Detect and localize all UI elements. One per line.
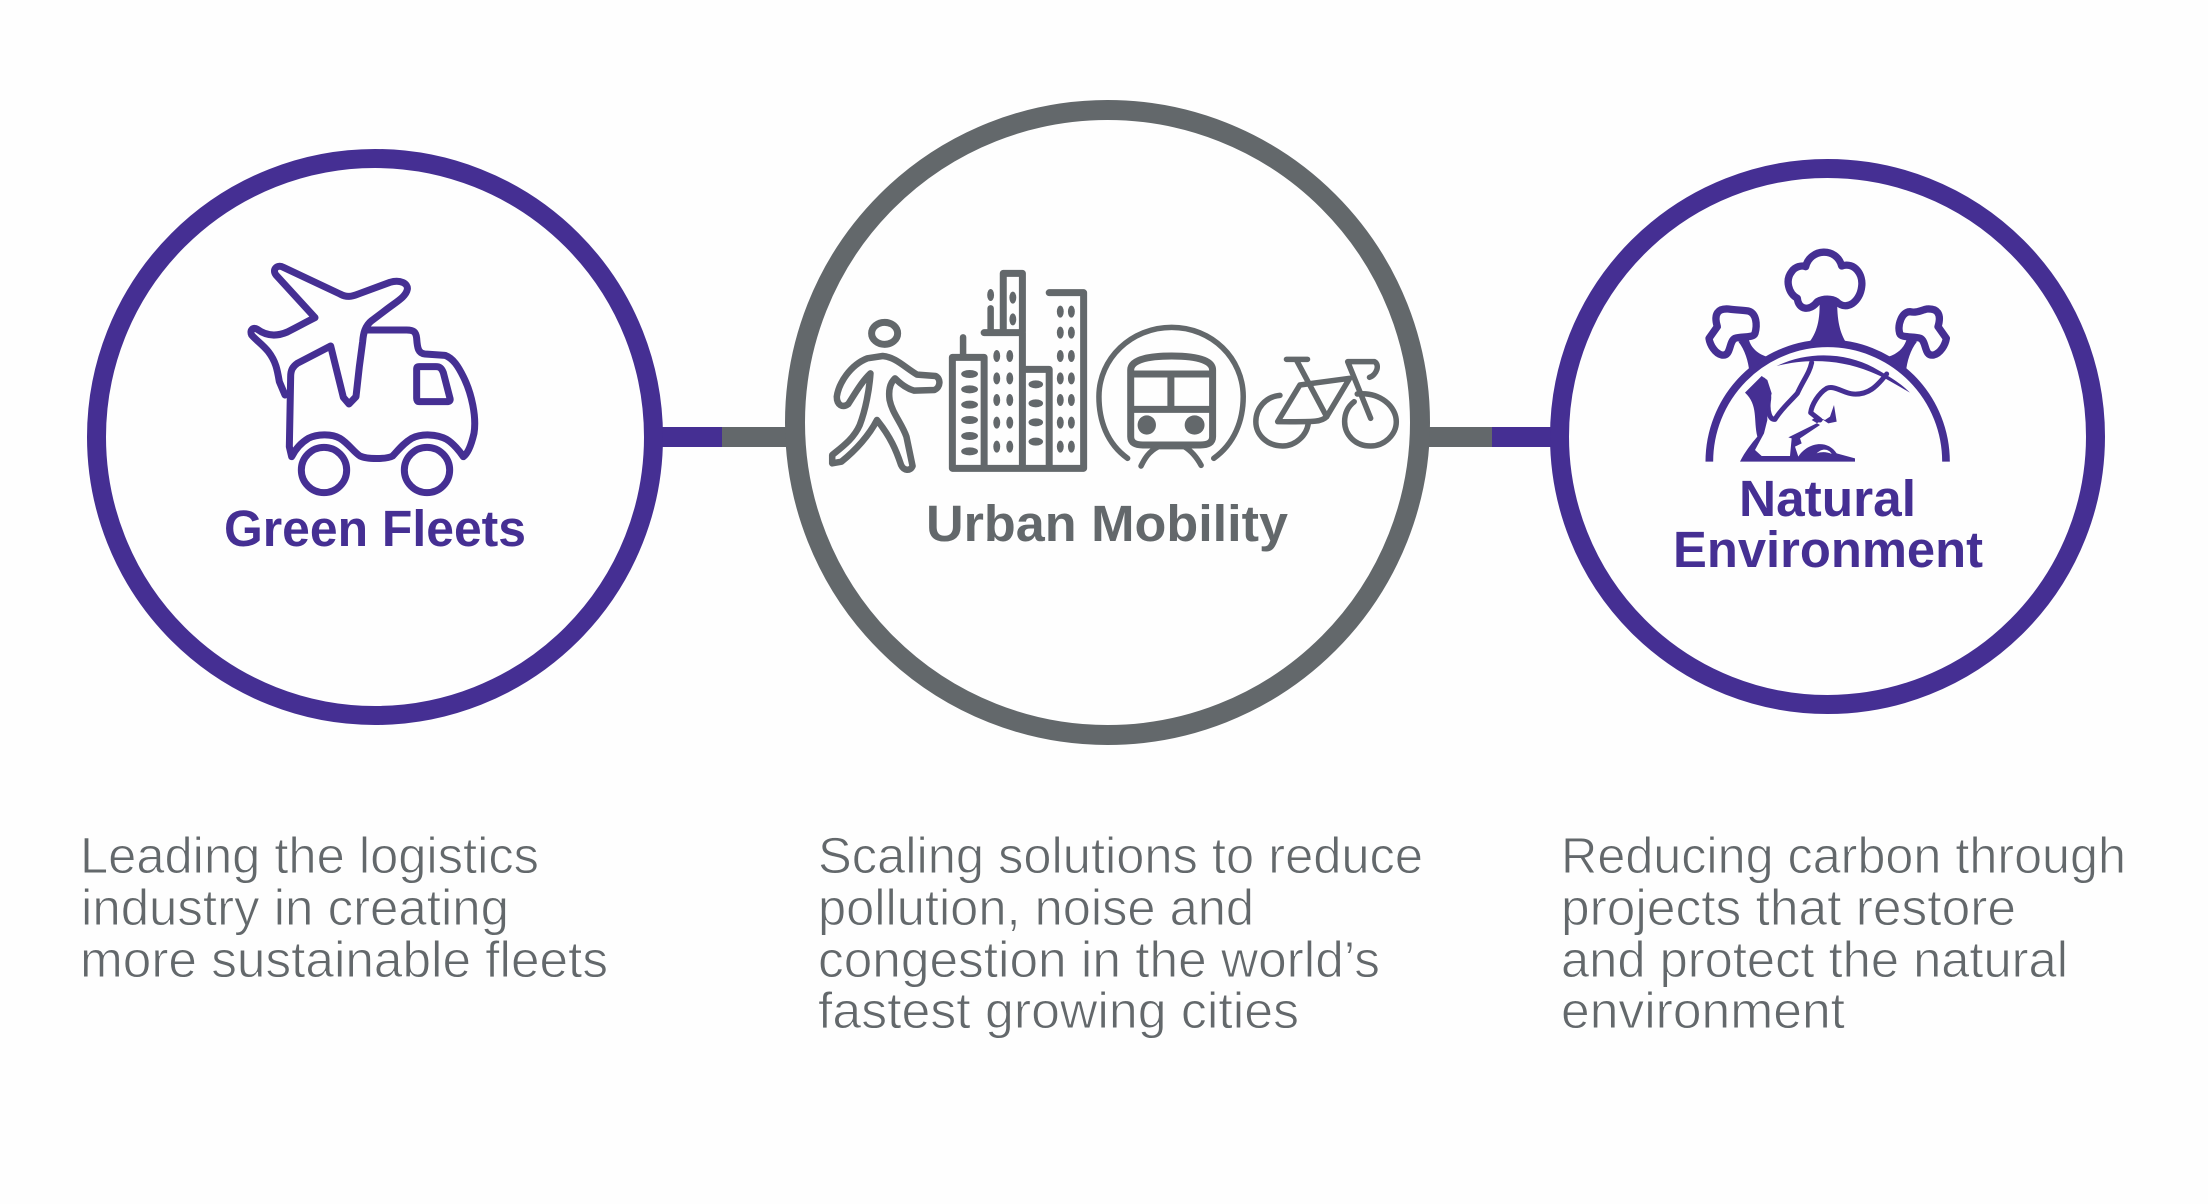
- text block: natural environment description: projects that restore: [1561, 879, 2016, 936]
- text block: urban mobility description: fastest growing cities: [818, 982, 1299, 1039]
- icon: plane and truck: [251, 266, 475, 493]
- text block: natural environment description: environment: [1561, 982, 1845, 1039]
- circle ring: natural environment: [1560, 168, 2096, 704]
- text block: green fleets description: more sustainable fleets: [80, 931, 608, 988]
- text block: green fleets description: Leading the logistics: [80, 827, 539, 884]
- panel: natural environment: [1560, 168, 2096, 704]
- text block: green fleets description: industry in creating: [81, 879, 509, 936]
- text block: urban mobility description: Scaling solutions to reduce: [818, 827, 1423, 884]
- text block: natural environment description: Reducing carbon through: [1561, 827, 2126, 884]
- text block: natural environment description: [1561, 827, 2126, 1039]
- icon: bicycle: [1256, 359, 1396, 446]
- text block: urban mobility description: congestion in the world’s: [818, 931, 1380, 988]
- circle ring: green fleets: [96, 158, 654, 716]
- icon: city buildings: [952, 273, 1084, 468]
- text block: natural environment description: and protect the natural: [1561, 931, 2068, 988]
- circle ring: urban mobility: [795, 110, 1420, 735]
- text block: urban mobility description: pollution, noise and: [818, 879, 1254, 936]
- icon: globe with trees: [1709, 252, 1946, 462]
- connector: green fleets to urban mobility: [655, 427, 792, 447]
- connector: urban mobility to natural environment: [1425, 427, 1558, 447]
- heading: urban mobility: Urban Mobility: [926, 495, 1289, 552]
- panel: urban mobility: [795, 110, 1420, 735]
- icons: urban mobility: [832, 273, 1396, 470]
- heading: green fleets: Green Fleets: [224, 500, 526, 557]
- text block: green fleets description: [80, 827, 608, 988]
- panel: green fleets: [96, 158, 654, 716]
- icon: metro train: [1099, 327, 1243, 466]
- icon: pedestrian: [832, 322, 939, 470]
- heading: natural environment: Natural: [1739, 470, 1916, 527]
- trees: [1709, 252, 1946, 372]
- heading: natural environment: Environment: [1673, 521, 1983, 578]
- heading: natural environment: [1673, 470, 1983, 578]
- continents: [1740, 363, 1887, 462]
- text block: urban mobility description: [818, 827, 1423, 1039]
